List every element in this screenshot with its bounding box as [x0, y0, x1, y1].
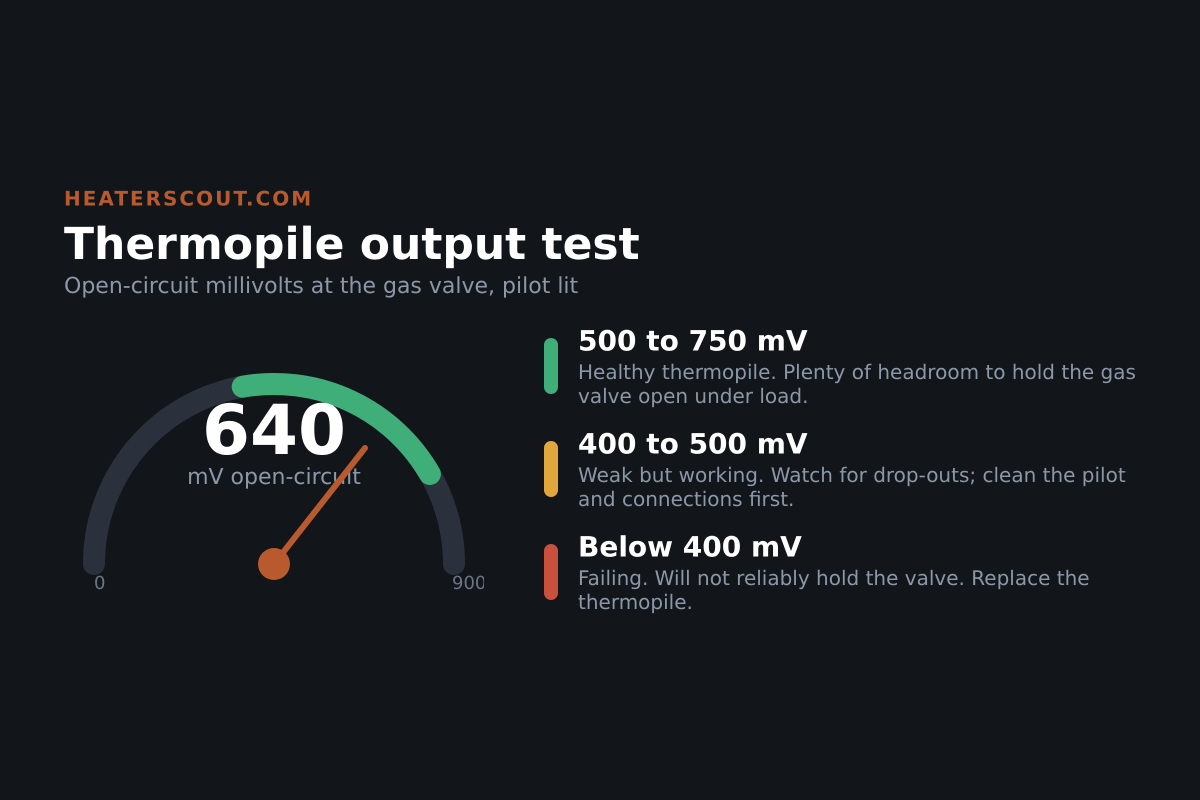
band: weak [544, 428, 1126, 511]
subtitle: Open-circuit millivolts at the gas valve, pilot lit [64, 274, 579, 299]
weak description: Weak but working. Watch for drop-outs; clean the pilot [578, 463, 1126, 487]
gauge healthy band [243, 384, 430, 474]
weak colour bar [544, 441, 558, 497]
gauge chart [94, 384, 486, 594]
failing description: thermopile. [578, 590, 693, 614]
title: Thermopile output test [64, 219, 640, 270]
gauge hub [258, 548, 290, 580]
healthy colour bar [544, 338, 558, 394]
scale maximum: 900 [452, 573, 486, 594]
weak description: and connections first. [578, 487, 794, 511]
band: failing [544, 530, 1090, 614]
gauge track [94, 384, 454, 564]
failing heading: Below 400 mV [578, 530, 802, 564]
weak heading: 400 to 500 mV [578, 428, 808, 460]
healthy description: Healthy thermopile. Plenty of headroom to hold the gas [578, 360, 1136, 384]
scale minimum: 0 [94, 573, 105, 594]
healthy heading: 500 to 750 mV [578, 324, 808, 358]
gauge value: 640 [202, 391, 346, 471]
eyebrow: brand: HEATERSCOUT.COM [64, 186, 313, 210]
gauge unit label: mV open-circuit [187, 465, 361, 490]
band: healthy [544, 324, 1136, 408]
failing colour bar [544, 544, 558, 600]
healthy description: valve open under load. [578, 384, 808, 408]
gauge needle [281, 445, 368, 554]
failing description: Failing. Will not reliably hold the valve. Replace the [578, 566, 1090, 590]
